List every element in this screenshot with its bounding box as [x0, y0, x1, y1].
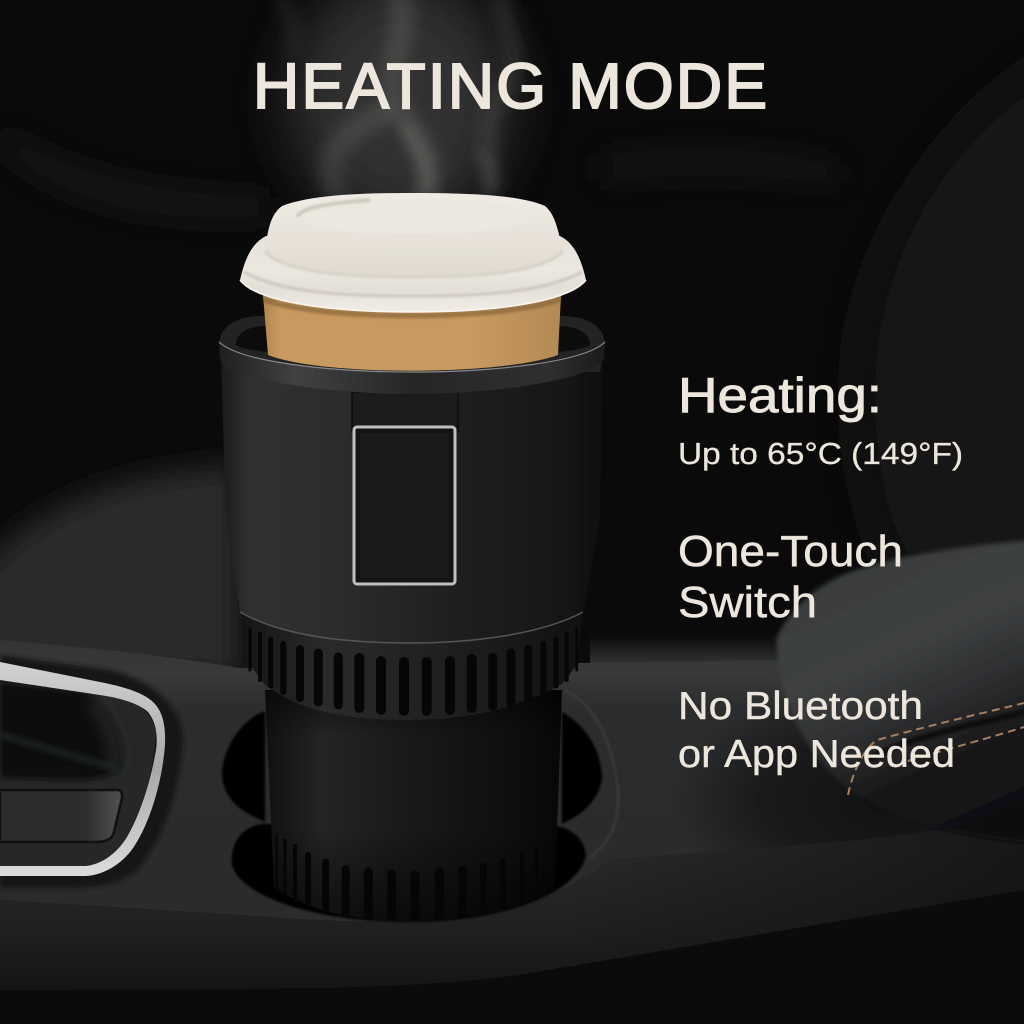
feature text: one-touch switch: One-Touch	[678, 527, 903, 576]
gear shifter surround	[0, 655, 183, 888]
holder rim front	[219, 342, 605, 394]
shifter groove	[0, 655, 183, 888]
lid brim groove	[244, 272, 582, 296]
vented ring	[240, 606, 583, 720]
paper cup	[263, 295, 561, 371]
title: HEATING MODE	[253, 50, 767, 122]
feature text: one-touch switch: Switch	[678, 578, 817, 627]
feature text: one-touch switch	[678, 527, 903, 627]
shifter boot	[0, 682, 123, 780]
feature text: no bluetooth or app	[678, 685, 955, 776]
lid brim edge	[240, 280, 586, 312]
steam rising from the cup	[280, 0, 513, 225]
cup holder wells	[222, 690, 618, 922]
heater holder lower body	[265, 690, 562, 925]
holder upper body	[221, 360, 603, 643]
feature text: heating temperature: Heating:	[678, 369, 882, 423]
switch housing	[352, 392, 458, 432]
upper well	[222, 712, 265, 822]
lid dome	[265, 193, 563, 276]
feature text: no bluetooth or app: or App Needed	[678, 733, 955, 776]
shifter tray	[0, 790, 122, 842]
lid dome shadow	[265, 251, 563, 277]
coffee lid	[240, 193, 586, 312]
console surface	[0, 640, 1024, 922]
vent slots	[250, 629, 577, 711]
lid brim	[240, 236, 586, 312]
lower vent slots	[276, 835, 505, 920]
armrest with contrast stitching	[777, 538, 1024, 845]
one-touch switch button	[354, 427, 455, 584]
feature text: heating temperature: Up to 65°C (149°F)	[678, 436, 963, 471]
console lower panel	[0, 890, 1024, 1024]
shifter inner panel	[0, 672, 156, 866]
console front lip	[0, 820, 1024, 990]
coffee cup holder opening	[219, 316, 605, 372]
feature text: no bluetooth or app: No Bluetooth	[678, 685, 923, 728]
right seat back	[856, 40, 1024, 570]
lid recess	[296, 199, 532, 234]
inner opening of holder	[236, 326, 590, 358]
chrome trim	[0, 662, 165, 876]
lower well	[232, 824, 586, 922]
lid recess shadow	[297, 200, 370, 217]
feature text: heating temperature	[678, 369, 963, 471]
